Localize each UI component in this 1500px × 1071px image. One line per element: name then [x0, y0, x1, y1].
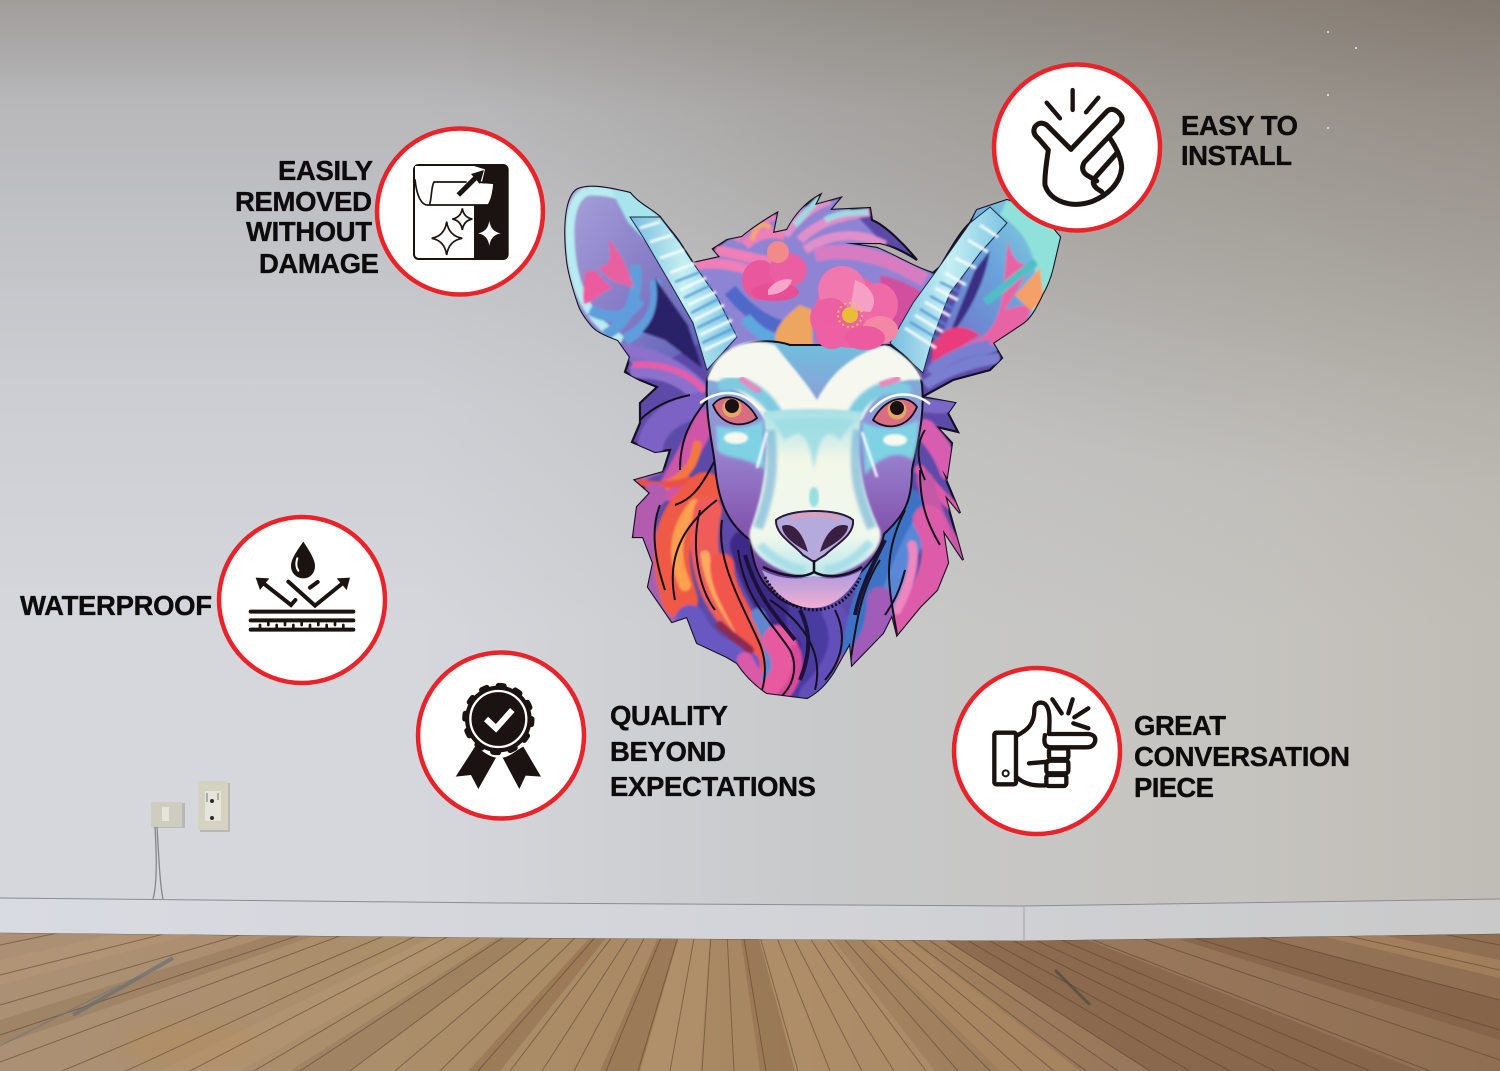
badge circle: [377, 128, 543, 294]
label: [1181, 110, 1298, 171]
label: EASILY: [278, 155, 373, 186]
label: BEYOND: [610, 736, 726, 767]
nose: [776, 511, 853, 562]
outlet plate: [198, 781, 230, 832]
sticker silhouette: [565, 187, 1060, 698]
label: EASY TO: [1181, 110, 1298, 141]
phone jack and cable: [151, 802, 185, 899]
label: QUALITY: [610, 700, 728, 731]
left horn: [630, 217, 737, 370]
wall outlet and phone jack: [151, 781, 230, 899]
forehead: [707, 342, 922, 420]
left mane: [638, 405, 770, 695]
face: [700, 341, 930, 610]
label: GREAT: [1134, 710, 1226, 741]
label: DAMAGE: [259, 248, 379, 279]
goat head wall decal: [555, 180, 1065, 698]
right ear: [925, 195, 1065, 385]
head base: [707, 341, 923, 606]
badge circle: [994, 64, 1160, 230]
icon: water repellent layers: [251, 542, 353, 630]
icon: snapping fingers: [1034, 90, 1122, 204]
icon: pointing thumbs up hand: [994, 699, 1095, 786]
label: WITHOUT: [246, 216, 372, 247]
snout: [750, 409, 880, 578]
label: CONVERSATION: [1134, 741, 1350, 772]
label: PIECE: [1134, 772, 1214, 803]
chin: [762, 570, 862, 608]
feature: easy to install: [994, 64, 1298, 230]
top hair: [694, 195, 934, 350]
left ear: [565, 186, 706, 395]
label: WATERPROOF: [20, 590, 212, 621]
baseboard: [0, 898, 1500, 943]
label: INSTALL: [1181, 140, 1292, 171]
bottom beard: [745, 545, 840, 695]
mane ink lines: [640, 395, 940, 697]
icon: peeling decal: [414, 165, 508, 259]
feature: great conversation piece: [954, 668, 1350, 834]
feature: easily removed without damage: [235, 128, 543, 294]
wooden floor: [0, 933, 1500, 1071]
mouth: [763, 560, 862, 576]
feature: waterproof: [20, 517, 385, 683]
label: [1134, 710, 1350, 803]
label: EXPECTATIONS: [610, 771, 816, 802]
label: [610, 700, 816, 802]
goat artwork: [555, 180, 1065, 697]
badge circle: [954, 668, 1120, 834]
feature: quality beyond expectations: [418, 652, 816, 818]
small flower: [742, 241, 807, 301]
label: [235, 155, 379, 279]
badge circle: [219, 517, 385, 683]
right mane: [850, 402, 960, 665]
icon: award rosette: [456, 686, 541, 789]
left eye: [700, 393, 760, 424]
large flower: [810, 266, 898, 350]
right horn: [890, 207, 1007, 373]
right eye: [870, 394, 930, 426]
upper cheeks: [716, 420, 918, 475]
badge circle: [418, 652, 584, 818]
label: REMOVED: [235, 186, 372, 217]
